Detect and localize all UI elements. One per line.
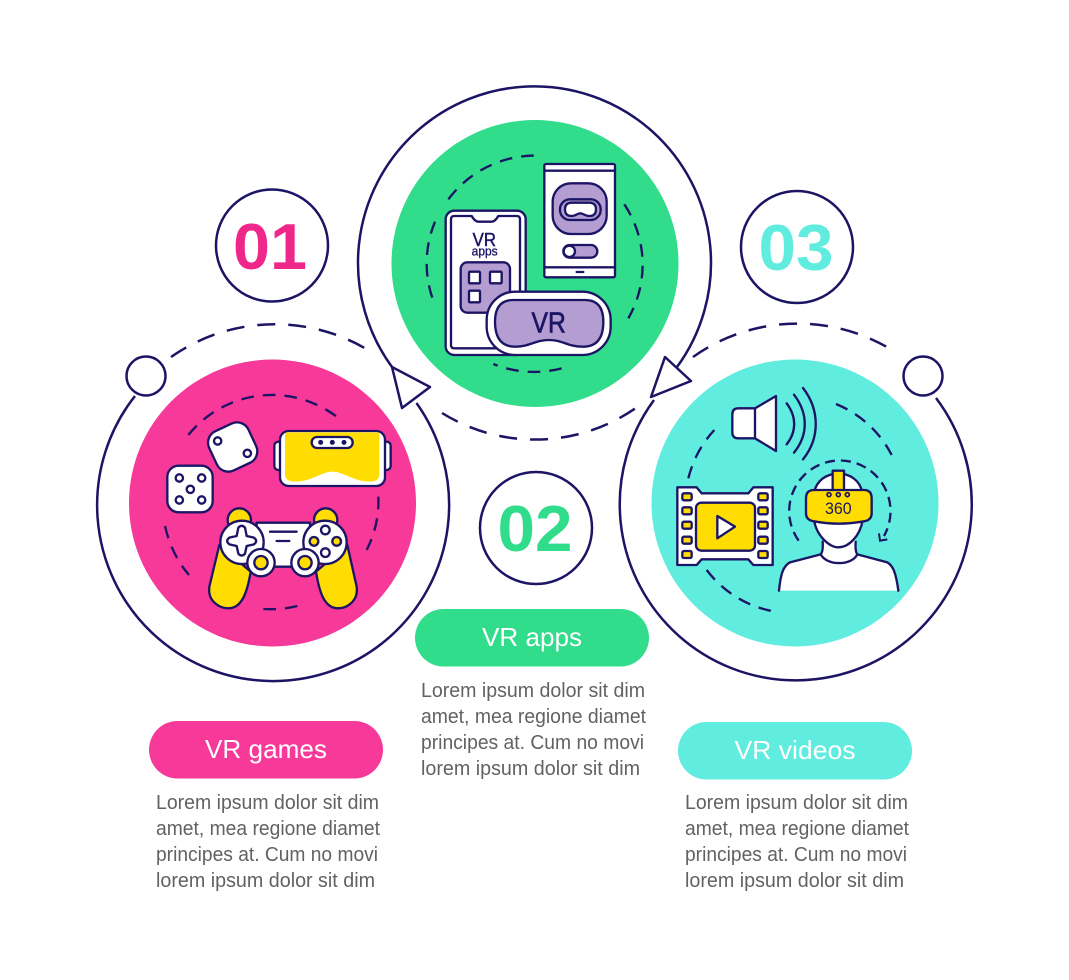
node circle: right (904, 356, 942, 396)
label pill: VR apps (415, 609, 649, 666)
text block: VR games: Lorem ipsum dolor sit dim (156, 792, 379, 814)
text block: VR games: principes at. Cum no movi (156, 844, 378, 866)
icon: tablet (544, 164, 615, 277)
panel: VR games circle (97, 324, 449, 681)
icon: purple VR headset (487, 292, 611, 355)
number badge 01: 01 (233, 210, 307, 283)
inner dashed ring: apps (427, 156, 643, 372)
label pill: VR games: VR games (205, 734, 327, 764)
outer ring: VR apps (358, 86, 711, 367)
label pill: VR apps: VR apps (482, 622, 582, 652)
text block: VR videos: Lorem ipsum dolor sit dim (685, 792, 908, 814)
icon: die five (167, 466, 213, 512)
dashed arc: VR apps (442, 405, 640, 440)
text block: VR apps: amet, mea regione diamet (421, 706, 646, 728)
icon: die two (204, 418, 261, 476)
icon: purple VR headset: VR (531, 307, 566, 339)
label pill: VR games (149, 721, 383, 778)
inner dashed ring: games (165, 395, 378, 609)
text block: VR videos: principes at. Cum no movi (685, 844, 907, 866)
icon: film strip with play button (677, 487, 773, 565)
icon group: videos (677, 388, 898, 611)
outer ring: VR games (97, 396, 449, 681)
label pill: VR videos: VR videos (734, 735, 856, 765)
dashed arc: VR games (171, 324, 368, 357)
icon: smartphone with apps (446, 211, 526, 355)
outer ring: VR videos (620, 398, 972, 680)
arrow: pink ring into green (392, 367, 430, 408)
inner dashed ring: videos (688, 404, 892, 611)
number badge 02: 02 (498, 492, 572, 565)
node circle: left (126, 356, 166, 396)
pink disc (129, 360, 416, 646)
icon: speaker with sound waves (732, 388, 816, 459)
text block: VR videos: lorem ipsum dolor sit dim (685, 870, 904, 892)
text block: VR games: amet, mea regione diamet (156, 818, 380, 840)
text block: VR games (156, 792, 380, 892)
text block: VR videos: amet, mea regione diamet (685, 818, 909, 840)
icon: gamepad (209, 508, 357, 608)
icon group: apps (427, 156, 643, 372)
icon: yellow VR headset (274, 431, 391, 486)
text block: VR apps: principes at. Cum no movi (421, 732, 644, 754)
number badge 01 (216, 190, 328, 302)
teal disc (652, 360, 938, 646)
icon: person with 360 headset: 360 (825, 499, 852, 518)
panel: VR apps circle (358, 86, 711, 440)
icon: smartphone with apps: apps (472, 245, 498, 259)
green disc (392, 120, 678, 407)
icon: smartphone with apps: VR (473, 229, 496, 250)
text block: VR videos (685, 792, 909, 892)
icon: person with 360 headset (779, 460, 898, 591)
panel: VR videos circle (620, 324, 972, 680)
text block: VR games: lorem ipsum dolor sit dim (156, 870, 375, 892)
number badge 03: 03 (758, 211, 834, 284)
text block: VR apps: Lorem ipsum dolor sit dim (421, 680, 645, 702)
dashed arc: VR videos (693, 324, 892, 357)
number badge 03 (741, 191, 853, 303)
text block: VR apps (421, 680, 646, 780)
arrow: green ring into teal (651, 357, 691, 397)
number badge 02 (480, 472, 592, 584)
label pill: VR videos (678, 722, 912, 780)
icon group: games (165, 395, 391, 609)
text block: VR apps: lorem ipsum dolor sit dim (421, 758, 640, 780)
